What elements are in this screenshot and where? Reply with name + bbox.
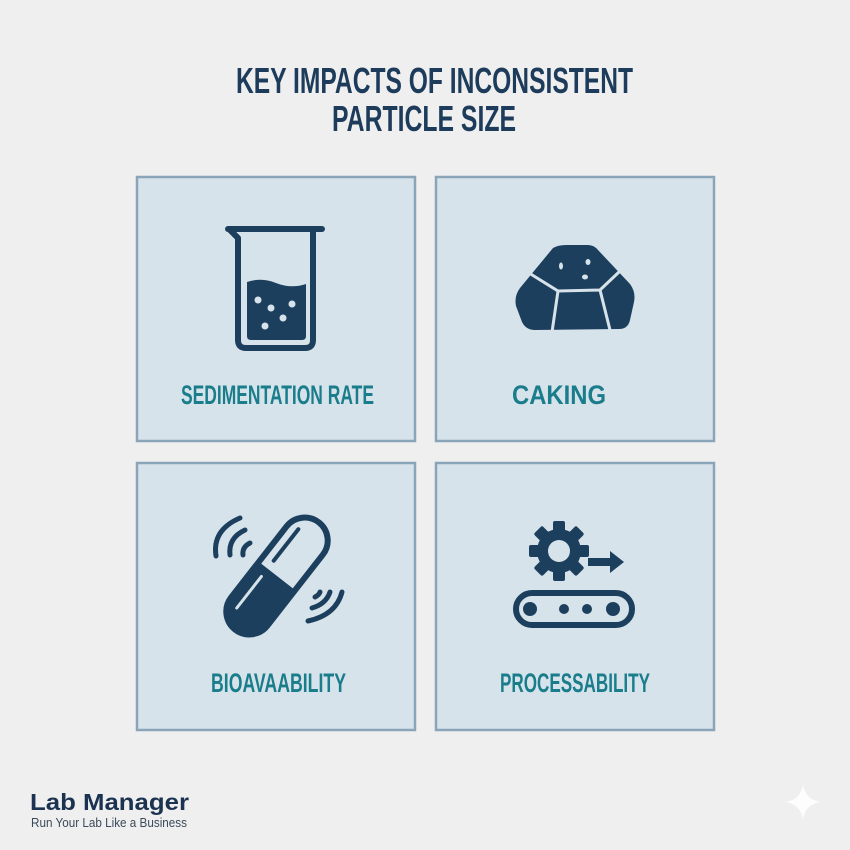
logo: Lab Manager: Lab Manager: [30, 789, 189, 815]
label: processability: PROCESSABILITY: [500, 668, 650, 698]
logo: Lab Manager: [30, 789, 189, 830]
label: caking: CAKING: [512, 380, 606, 410]
icon: caked lump: [516, 245, 634, 332]
panel: caking: [436, 177, 714, 441]
title: PARTICLE SIZE: [332, 98, 516, 139]
icon: capsule with waves: [216, 508, 342, 644]
title: KEY IMPACTS OF INCONSISTENT: [236, 60, 633, 101]
label: bioavailability: BIOAVAABILITY: [211, 668, 346, 698]
icon: gear and conveyor: [516, 521, 632, 625]
logo: Lab Manager: Run Your Lab Like a Business: [31, 815, 187, 830]
panel: sedimentation rate: [137, 177, 415, 441]
panel: bioavailability: [137, 463, 415, 730]
icon: beaker: [228, 229, 322, 348]
icon: sparkle: [785, 784, 821, 820]
title: [236, 60, 633, 139]
label: sedimentation rate: SEDIMENTATION RATE: [181, 380, 374, 410]
panel: processability: [436, 463, 714, 730]
